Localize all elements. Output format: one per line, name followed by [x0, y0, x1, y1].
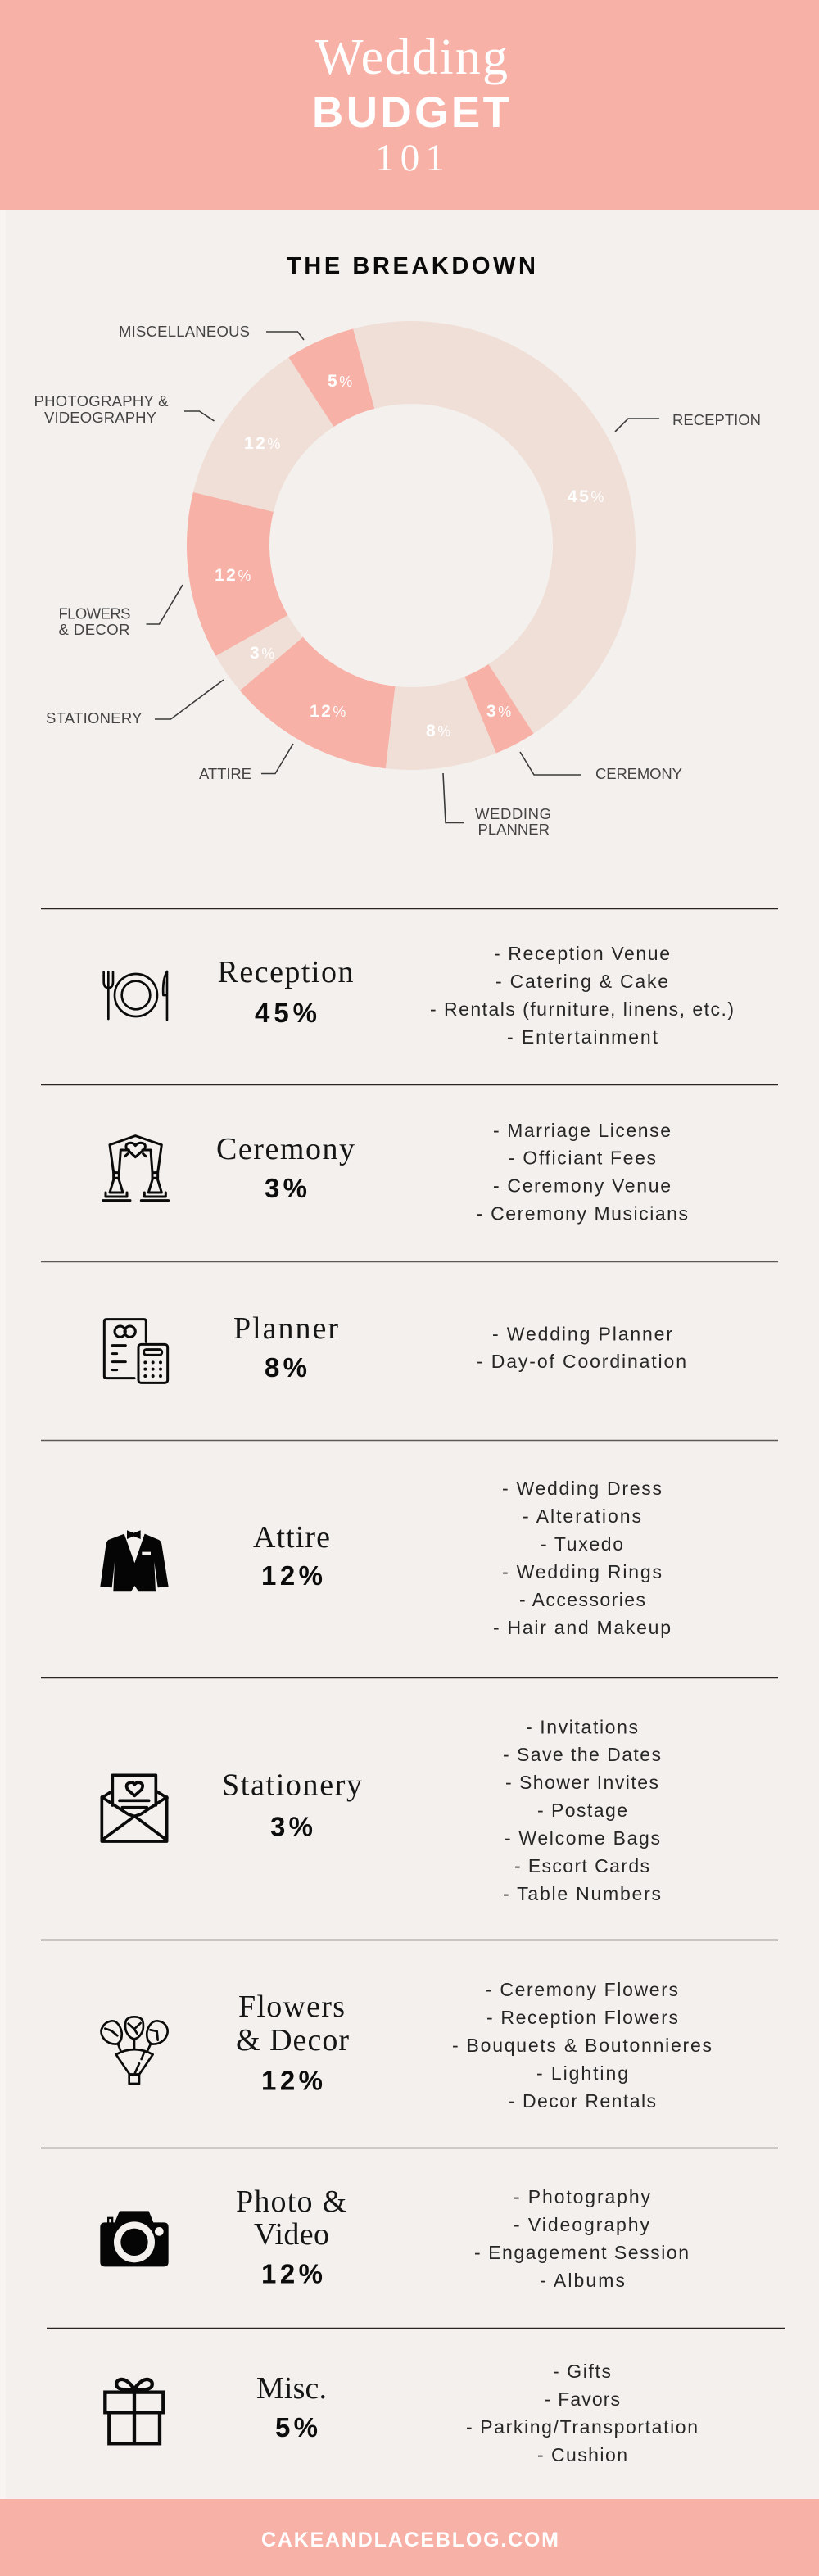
misc percent: 5% — [275, 2412, 318, 2442]
heading: the breakdown: THE BREAKDOWN — [287, 253, 536, 279]
ceremony list: - Ceremony Venue — [493, 1175, 671, 1196]
label: stationery — [46, 680, 224, 727]
icon: camera — [100, 2211, 169, 2266]
donut percentages: 3% — [486, 702, 514, 721]
donut percentages — [215, 372, 606, 740]
label: ceremony — [520, 752, 682, 782]
row: attire — [100, 1478, 671, 1638]
stationery list — [503, 1717, 661, 1904]
label: attire — [199, 744, 293, 782]
flowers percent: 12% — [261, 2066, 323, 2095]
icon: envelope with invitation — [102, 1775, 167, 1841]
planner list: - Wedding Planner — [492, 1324, 672, 1345]
title: Wedding: Wedding — [315, 29, 508, 85]
segment: reception 45% — [187, 321, 636, 770]
attire list: - Alterations — [523, 1505, 641, 1527]
flowers list: - Lighting — [536, 2062, 628, 2084]
segment: miscellaneous 5% — [158, 292, 664, 799]
reception list: - Entertainment — [507, 1026, 658, 1048]
row: planner — [104, 1311, 686, 1383]
label: photography and videography: PHOTOGRAPHY & — [34, 392, 169, 410]
stationery list: - Welcome Bags — [505, 1827, 660, 1849]
segment: ceremony 3% — [158, 292, 664, 799]
attire name: Attire — [253, 1520, 330, 1555]
photo list: - Photography — [514, 2186, 650, 2207]
footer banner — [0, 2499, 819, 2576]
donut percentages: 45% — [568, 487, 606, 506]
planner percent: 8% — [265, 1352, 307, 1383]
attire list: - Hair and Makeup — [493, 1617, 671, 1638]
label: flowers and decor — [59, 585, 183, 638]
label: photography and videography: VIDEOGRAPHY — [44, 409, 156, 426]
reception percent: 45% — [255, 998, 317, 1028]
reception name: Reception — [218, 955, 354, 989]
stationery list: - Shower Invites — [505, 1772, 658, 1793]
donut percentages: 8% — [426, 722, 453, 740]
attire list: - Wedding Dress — [502, 1478, 662, 1499]
photo list — [474, 2186, 689, 2291]
flowers list: - Ceremony Flowers — [486, 1979, 678, 2000]
title: 101: 101 — [375, 137, 445, 179]
stationery list: - Save the Dates — [503, 1744, 661, 1765]
label: wedding planner: PLANNER — [478, 821, 550, 838]
flowers name: Flowers — [238, 1990, 345, 2024]
label: wedding planner — [443, 773, 551, 838]
label: miscellaneous: MISCELLANEOUS — [119, 323, 250, 340]
reception list: - Reception Venue — [494, 943, 670, 964]
ceremony list: - Officiant Fees — [509, 1147, 656, 1168]
donut percentages: 3% — [250, 644, 277, 663]
flowers list — [452, 1979, 712, 2112]
misc list: - Cushion — [537, 2444, 627, 2465]
reception list: - Rentals (furniture, linens, etc.) — [430, 998, 734, 1020]
planner list: - Day-of Coordination — [477, 1351, 686, 1372]
label: reception: RECEPTION — [672, 411, 761, 428]
stationery list: - Table Numbers — [503, 1883, 661, 1904]
reception list — [430, 943, 734, 1048]
header banner — [0, 0, 819, 210]
flowers list: - Decor Rentals — [509, 2090, 656, 2112]
photo name: Video — [254, 2217, 329, 2252]
flowers name — [236, 1990, 349, 2058]
footer website: CAKEANDLACEBLOG.COM — [261, 2528, 559, 2551]
stationery list: - Invitations — [526, 1717, 638, 1738]
stationery list: - Escort Cards — [514, 1855, 649, 1877]
segment: wedding planner 8% — [173, 307, 649, 784]
label: ceremony: CEREMONY — [595, 765, 682, 782]
ceremony percent: 3% — [265, 1173, 307, 1203]
segment: attire 12% — [208, 342, 614, 749]
planner list — [477, 1324, 686, 1372]
segment: stationery 3% — [153, 287, 669, 804]
icon: gift box — [105, 2379, 163, 2443]
attire list: - Accessories — [519, 1589, 645, 1610]
stationery list: - Postage — [537, 1800, 627, 1821]
row: ceremony — [103, 1120, 688, 1224]
misc list: - Favors — [545, 2388, 620, 2410]
ceremony list: - Marriage License — [493, 1120, 671, 1141]
misc list: - Gifts — [553, 2361, 611, 2382]
photo name: Photo & — [236, 2184, 346, 2219]
label: reception — [615, 411, 761, 432]
ceremony name: Ceremony — [216, 1132, 355, 1166]
icon: wedding arch — [103, 1136, 169, 1201]
row: miscellaneous — [105, 2361, 698, 2465]
misc name: Misc. — [256, 2371, 327, 2406]
ceremony list: - Ceremony Musicians — [477, 1202, 688, 1224]
donut chart — [153, 287, 669, 804]
icon: planner document and calculator — [104, 1320, 168, 1383]
title: BUDGET: BUDGET — [312, 88, 509, 137]
photo list: - Engagement Session — [474, 2242, 689, 2263]
stationery percent: 3% — [270, 1812, 313, 1841]
icon: plate with fork and knife — [104, 971, 167, 1020]
label: photography and videography — [34, 392, 215, 426]
donut percentages: 12% — [310, 702, 348, 721]
photo list: - Videography — [514, 2214, 650, 2235]
row: reception — [104, 943, 734, 1048]
planner name: Planner — [233, 1311, 338, 1346]
segment: flowers and decor 12% — [162, 297, 660, 795]
label: flowers and decor: & DECOR — [59, 621, 129, 638]
photo list: - Albums — [540, 2270, 625, 2291]
label: wedding planner: WEDDING — [475, 805, 551, 822]
photo name — [236, 2184, 346, 2252]
flowers list: - Reception Flowers — [486, 2007, 678, 2028]
donut percentages: 12% — [244, 434, 283, 453]
label: attire: ATTIRE — [199, 765, 251, 782]
misc list: - Parking/Transportation — [466, 2416, 698, 2438]
attire list: - Wedding Rings — [502, 1561, 662, 1582]
icon: bouquet of roses — [102, 2017, 168, 2084]
segment: photography and videography 12% — [190, 324, 632, 767]
icon: tuxedo jacket — [100, 1530, 169, 1591]
attire percent: 12% — [261, 1560, 323, 1591]
reception list: - Catering & Cake — [495, 971, 668, 992]
attire list — [493, 1478, 671, 1638]
flowers name: & Decor — [236, 2023, 349, 2058]
donut percentages: 5% — [328, 372, 355, 391]
flowers list: - Bouquets & Boutonnieres — [452, 2035, 712, 2056]
stationery name: Stationery — [222, 1768, 362, 1802]
photo percent: 12% — [261, 2259, 323, 2289]
label: stationery: STATIONERY — [46, 709, 143, 727]
donut percentages: 12% — [215, 566, 253, 585]
label: flowers and decor: FLOWERS — [59, 604, 131, 622]
attire list: - Tuxedo — [541, 1533, 623, 1555]
row: photo and video — [100, 2184, 689, 2291]
row: flowers and decor — [102, 1979, 712, 2112]
misc list — [466, 2361, 698, 2465]
ceremony list — [477, 1120, 688, 1224]
row: stationery — [102, 1717, 661, 1904]
